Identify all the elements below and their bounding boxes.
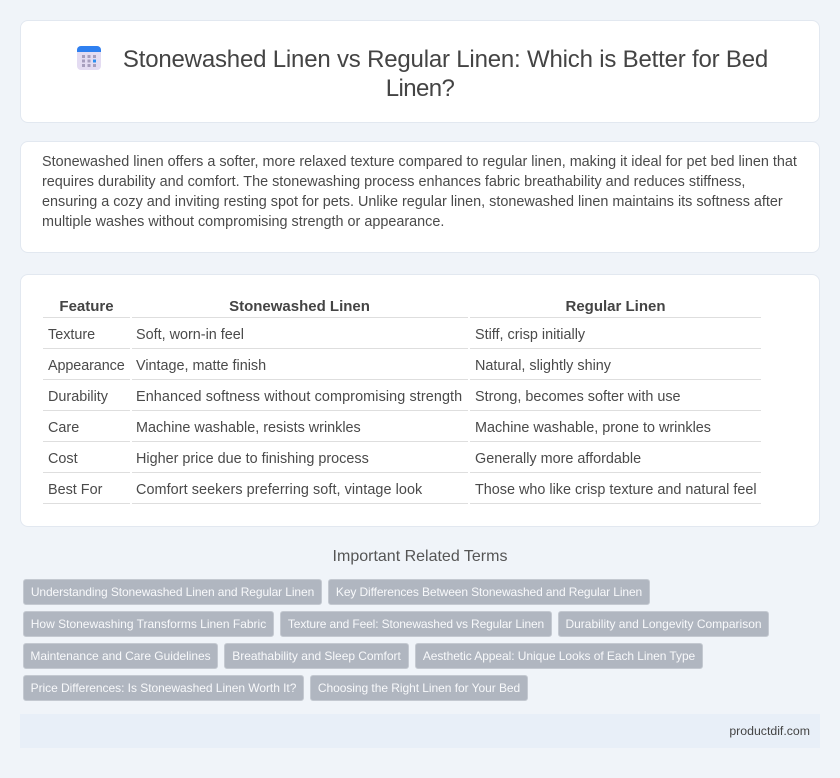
tag: Texture and Feel: Stonewashed vs Regular Linen [288, 617, 544, 631]
tag: Maintenance and Care Guidelines [30, 649, 211, 663]
row: durability: Durability [48, 389, 108, 405]
row: appearance: Natural, slightly shiny [475, 358, 611, 374]
row: care: Machine washable, resists wrinkles [136, 420, 361, 436]
icon: calendar [77, 46, 101, 70]
column headers [59, 298, 666, 315]
row: texture: Stiff, crisp initially [475, 327, 585, 343]
row: cost: Cost [48, 451, 78, 467]
title: Stonewashed Linen vs Regular Linen: Which is Better for Bed [123, 46, 768, 73]
row: texture [48, 327, 585, 343]
row: best for: Those who like crisp texture and natural feel [475, 482, 757, 498]
row: best for [48, 482, 757, 498]
row: texture: Texture [48, 327, 95, 343]
row: best for: Best For [48, 482, 102, 498]
column headers: Feature [59, 298, 114, 315]
tags: related terms [23, 579, 769, 701]
tag [310, 675, 528, 701]
description text: ensuring a cozy and inviting resting spot for pets. Unlike regular linen, stonewashed linen maintains its softness after [42, 194, 783, 210]
row: cost: Generally more affordable [475, 451, 641, 467]
row: texture: Soft, worn-in feel [136, 327, 244, 343]
title: Linen? [386, 75, 454, 102]
tag [224, 643, 409, 669]
footer bar [20, 714, 820, 748]
tag: Aesthetic Appeal: Unique Looks of Each Linen Type [423, 649, 695, 663]
title [123, 46, 768, 102]
row: care: Care [48, 420, 79, 436]
tag: Breathability and Sleep Comfort [232, 649, 401, 663]
row: care: Machine washable, prone to wrinkles [475, 420, 711, 436]
tag: Understanding Stonewashed Linen and Regular Linen [31, 585, 314, 599]
column headers: Stonewashed Linen [229, 298, 370, 315]
tag [23, 579, 322, 605]
row: appearance: Appearance [48, 358, 125, 374]
tag [23, 611, 274, 637]
row: appearance [48, 358, 611, 374]
tag: How Stonewashing Transforms Linen Fabric [31, 617, 266, 631]
description text: requires durability and comfort. The stonewashing process enhances fabric breathability and reduces stiffness, [42, 174, 745, 190]
footer source: productdif.com [729, 724, 810, 738]
tag: Key Differences Between Stonewashed and Regular Linen [336, 585, 642, 599]
tag [23, 675, 304, 701]
row: best for: Comfort seekers preferring soft, vintage look [136, 482, 422, 498]
row: cost [48, 451, 641, 467]
description text: multiple washes without compromising strength or appearance. [42, 214, 444, 230]
panel: header [20, 20, 820, 123]
panel: description [20, 141, 820, 253]
description text [42, 154, 797, 230]
comparison table [59, 298, 666, 315]
row: appearance: Vintage, matte finish [136, 358, 266, 374]
description text: Stonewashed linen offers a softer, more relaxed texture compared to regular linen, making it ideal for pet bed linen that [42, 154, 797, 170]
tag: Choosing the Right Linen for Your Bed [318, 681, 520, 695]
row: durability [48, 389, 681, 405]
row: care [48, 420, 711, 436]
heading: related terms: Important Related Terms [333, 548, 507, 565]
row: durability: Enhanced softness without compromising strength [136, 389, 462, 405]
panel: comparison table [20, 274, 820, 527]
row: cost: Higher price due to finishing process [136, 451, 369, 467]
tag: Durability and Longevity Comparison [565, 617, 762, 631]
tag: Price Differences: Is Stonewashed Linen Worth It? [31, 681, 296, 695]
tag [328, 579, 650, 605]
column headers: Regular Linen [565, 298, 666, 315]
tag [280, 611, 552, 637]
row: durability: Strong, becomes softer with use [475, 389, 681, 405]
tag [23, 643, 218, 669]
tag [415, 643, 703, 669]
tag [558, 611, 769, 637]
